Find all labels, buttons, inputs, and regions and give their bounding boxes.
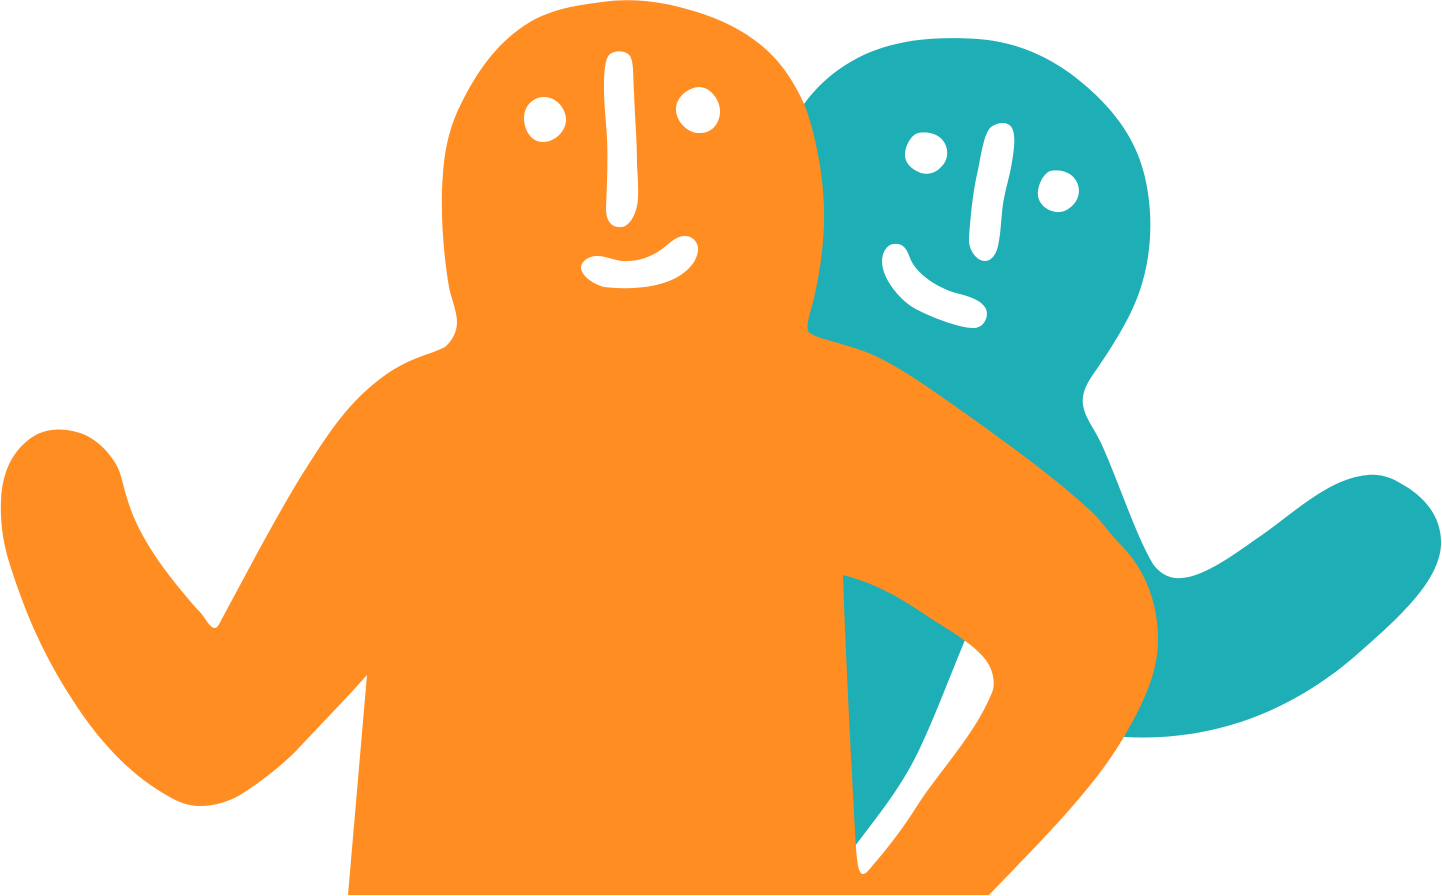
figure: teal character (780, 38, 1441, 846)
teal right eye (1038, 170, 1079, 212)
orange smile (581, 236, 698, 288)
orange nose (604, 51, 638, 227)
orange left eye (524, 97, 566, 142)
teal smile (882, 244, 987, 328)
teal left eye (905, 132, 947, 174)
teal nose (969, 123, 1014, 261)
orange right eye (676, 87, 720, 133)
teal body (780, 38, 1441, 846)
